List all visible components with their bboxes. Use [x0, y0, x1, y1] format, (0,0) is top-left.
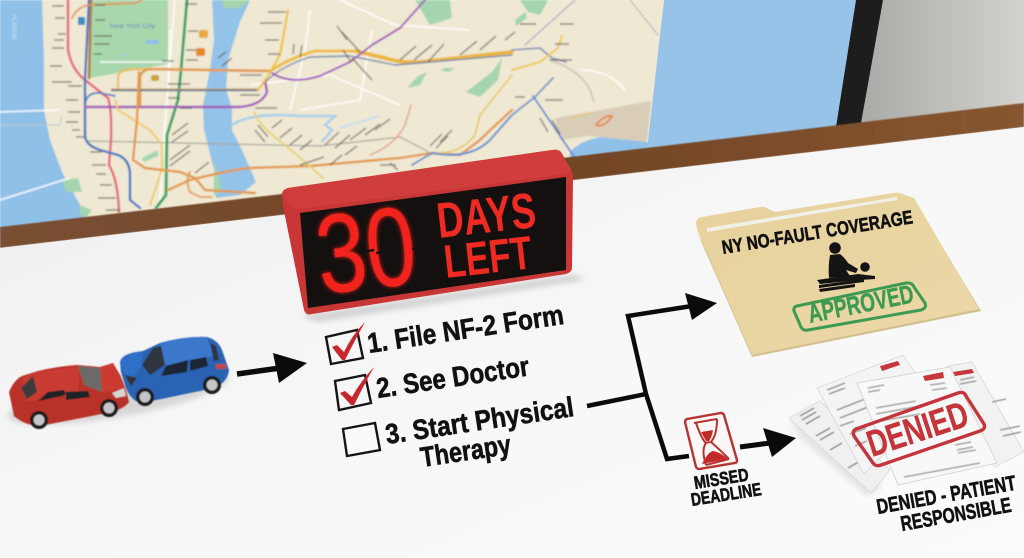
- clock top face: [282, 150, 570, 209]
- LEFT text: LEFT: [441, 225, 535, 288]
- denied stamp: [853, 392, 984, 466]
- approved stamp: [794, 278, 926, 330]
- clock shadow: [300, 274, 586, 322]
- bill: front: [857, 367, 997, 485]
- clock body: [282, 150, 573, 314]
- clock display: [300, 177, 566, 308]
- missed deadline label: DEADLINE: [689, 479, 763, 510]
- checklist item 1: 1. File NF-2 Form: [365, 299, 566, 359]
- checklist item 2: 2. See Doctor: [374, 350, 531, 404]
- arrow: missed deadline to denied: [740, 428, 796, 457]
- subway lines: [68, 0, 658, 212]
- checklist item 3 continued: Therapy: [418, 429, 513, 473]
- New York City label: New York City: [110, 23, 156, 30]
- segment gaps: [362, 247, 424, 253]
- denied stamp: DENIED: [862, 393, 973, 465]
- roads / tracks gray: [88, 137, 432, 155]
- denied patient responsible label: [875, 472, 1018, 536]
- digits 30: 30: [310, 183, 422, 318]
- arrow: crash to checklist: [237, 353, 307, 383]
- checkbox 1 checked: [326, 322, 365, 364]
- tan district: [555, 101, 651, 142]
- checklist: [326, 299, 576, 473]
- roads: [0, 0, 625, 200]
- water: inlet: [232, 115, 335, 142]
- approved stamp: APPROVED: [805, 278, 916, 329]
- Central Park: [90, 0, 168, 78]
- LED countdown clock: [282, 150, 573, 318]
- DAYS text: DAYS: [434, 182, 539, 249]
- blue car: [120, 337, 229, 406]
- checkbox 3 empty: [343, 423, 380, 456]
- red wheels: [30, 411, 48, 429]
- subway map: [0, 0, 670, 235]
- folder: NY no-fault coverage approved: [696, 193, 981, 357]
- hourglass icon: [685, 413, 737, 469]
- missed deadline label: MISSED: [692, 465, 750, 493]
- water: East River: [203, 0, 256, 198]
- table surface: [0, 127, 1024, 558]
- crashed cars: [4, 337, 232, 436]
- bill: far left: [789, 401, 890, 493]
- subway map: PLATION: [10, 14, 16, 39]
- map labels ticks: [50, 4, 574, 210]
- parks: [62, 0, 548, 218]
- denied bills stack: [789, 355, 1024, 496]
- water: bay: [569, 136, 648, 158]
- red car: [9, 363, 129, 429]
- bill: back middle: [817, 355, 935, 474]
- water: Hudson: [0, 0, 85, 235]
- folder title: NY NO-FAULT COVERAGE: [720, 207, 914, 259]
- blue wheels: [136, 388, 154, 406]
- icon: physical therapy: [817, 242, 875, 292]
- checkbox 2 checked: [335, 367, 374, 410]
- bill: far right: [948, 362, 1024, 467]
- branching arrows: [587, 293, 717, 459]
- checklist item 3: 3. Start Physical: [383, 391, 576, 450]
- missed deadline label: [689, 465, 763, 510]
- wooden ledge: [0, 103, 1024, 248]
